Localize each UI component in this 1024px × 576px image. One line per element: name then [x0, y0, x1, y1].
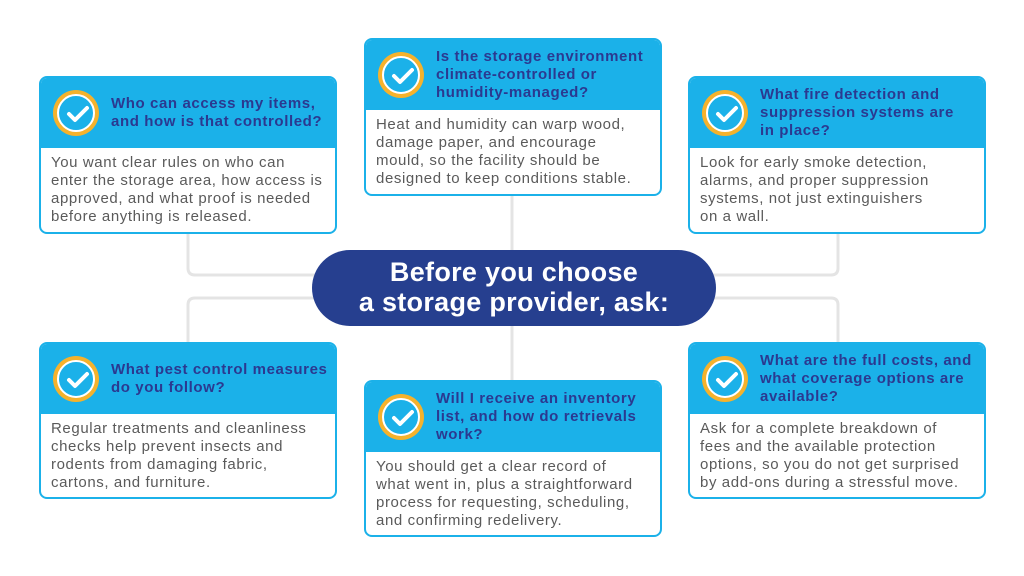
card: climate: Heat and humidity can warp wood,: [376, 116, 625, 133]
card: pest: cartons, and furniture.: [51, 474, 211, 491]
card: pest: rodents from damaging fabric,: [51, 456, 268, 473]
card: costs: options, so you do not get surprised: [700, 456, 959, 473]
card: climate: damage paper, and encourage: [376, 134, 597, 151]
card: pest: do you follow?: [111, 379, 225, 396]
card: access: [39, 76, 337, 234]
card: pest: Regular treatments and cleanliness: [51, 420, 307, 437]
card: inventory: [364, 380, 662, 537]
card: inventory: list, and how do retrievals: [436, 408, 636, 425]
card: fire: on a wall.: [700, 208, 769, 225]
card: access: Who can access my items,: [111, 95, 316, 112]
card: fire: alarms, and proper suppression: [700, 172, 929, 189]
card: climate: [364, 38, 662, 196]
card: pest: What pest control measures: [111, 361, 327, 378]
title pill: Before you choose: [390, 257, 638, 287]
card: access: and how is that controlled?: [111, 113, 322, 130]
card: access: You want clear rules on who can: [51, 154, 285, 171]
card: costs: by add-ons during a stressful move.: [700, 474, 959, 491]
card: costs: what coverage options are: [760, 370, 964, 387]
card: costs: [688, 342, 986, 499]
card: fire: Look for early smoke detection,: [700, 154, 927, 171]
card: costs: What are the full costs, and: [760, 352, 972, 369]
card: inventory: what went in, plus a straightforward: [376, 476, 633, 493]
card: inventory: process for requesting, scheduling,: [376, 494, 630, 511]
card: costs: Ask for a complete breakdown of: [700, 420, 937, 437]
card: pest: checks help prevent insects and: [51, 438, 283, 455]
card: inventory: You should get a clear record of: [376, 458, 606, 475]
title pill: [312, 250, 716, 326]
card: climate: designed to keep conditions stable.: [376, 170, 631, 187]
card: costs: fees and the available protection: [700, 438, 936, 455]
card: fire: suppression systems are: [760, 104, 954, 121]
card: fire: in place?: [760, 122, 830, 139]
card: climate: Is the storage environment: [436, 48, 643, 65]
card: fire: What fire detection and: [760, 86, 940, 103]
card: costs: available?: [760, 388, 839, 405]
card: inventory: and confirming redelivery.: [376, 512, 562, 529]
card: inventory: work?: [436, 426, 483, 443]
card: access: approved, and what proof is needed: [51, 190, 311, 207]
card: climate: climate-controlled or: [436, 66, 597, 83]
title pill: a storage provider, ask:: [359, 287, 669, 317]
card: pest: [39, 342, 337, 499]
card: access: before anything is released.: [51, 208, 252, 225]
card: access: enter the storage area, how access is: [51, 172, 323, 189]
card: climate: mould, so the facility should be: [376, 152, 600, 169]
card: inventory: Will I receive an inventory: [436, 390, 636, 407]
card: fire: systems, not just extinguishers: [700, 190, 923, 207]
card: fire: [688, 76, 986, 234]
card: climate: humidity-managed?: [436, 84, 589, 101]
